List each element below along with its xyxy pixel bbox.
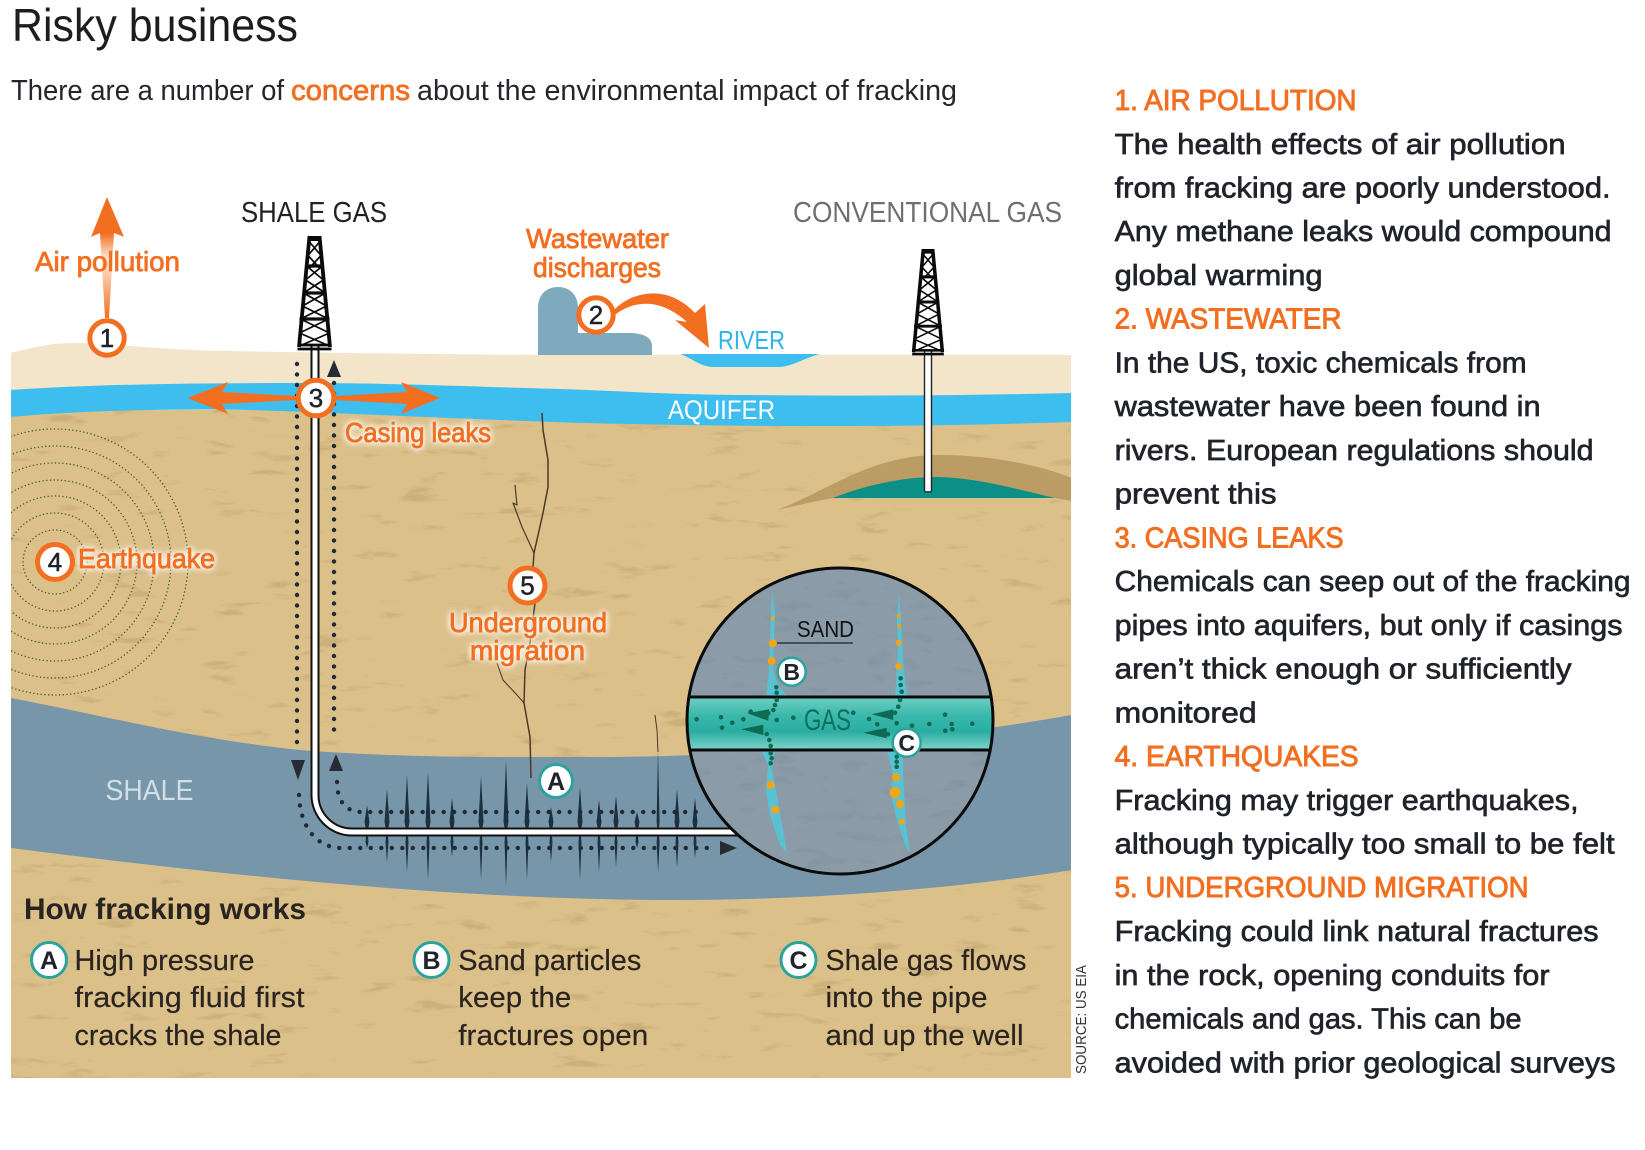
- section 1: air pollution: [1115, 85, 1612, 292]
- panel: magnified fracture view: [680, 566, 1000, 876]
- section 5: underground migration: [1115, 872, 1616, 1079]
- marker B: [778, 658, 806, 686]
- section 3: casing leaks: monitored: [1115, 698, 1257, 730]
- step A: cracks the shale: [74, 1020, 282, 1052]
- badge 2: [579, 298, 613, 332]
- sand label: [777, 616, 854, 643]
- label: aquifer: AQUIFER: [668, 395, 775, 425]
- label: air pollution: Air pollution: [35, 246, 180, 277]
- conventional gas pipe: [924, 350, 932, 492]
- section 2: wastewater: [1114, 304, 1594, 511]
- heading: how fracking works: How fracking works: [24, 893, 306, 926]
- badge 3: 3: [309, 383, 323, 413]
- section 4: earthquakes: 4. EARTHQUAKES: [1115, 741, 1359, 773]
- marker C: [893, 729, 921, 757]
- icon: conventional gas derrick: [912, 249, 944, 354]
- section 5: underground migration: Fracking could link natural fractures: [1115, 916, 1599, 948]
- river: [680, 354, 820, 367]
- section 4: earthquakes: [1115, 741, 1615, 861]
- section 3: casing leaks: [1115, 522, 1631, 730]
- arrow: air pollution: [91, 197, 124, 318]
- step B: Sand particles: [458, 945, 641, 977]
- section 1: air pollution: Any methane leaks would compound: [1115, 216, 1612, 248]
- step C: [781, 942, 1026, 1052]
- step B: keep the: [458, 982, 571, 1014]
- label: earthquake: Earthquake: [78, 543, 215, 574]
- step C: into the pipe: [826, 982, 988, 1014]
- section 4: earthquakes: Fracking may trigger earthquakes,: [1115, 785, 1579, 817]
- section 3: casing leaks: 3. CASING LEAKS: [1115, 522, 1344, 554]
- earthquake rings: [0, 429, 188, 695]
- badge 1: [90, 321, 124, 355]
- marker C: C: [898, 730, 915, 756]
- section 1: air pollution: The health effects of air pollution: [1115, 129, 1566, 161]
- marker B: B: [783, 659, 800, 685]
- section 2: wastewater: rivers. European regulations should: [1115, 435, 1594, 467]
- label: underground migration: Underground: [449, 607, 607, 638]
- badge 1: 1: [100, 323, 114, 353]
- natural fractures: [497, 413, 658, 778]
- fracture left: [761, 592, 788, 853]
- subtitle: concerns: [291, 75, 410, 107]
- band lines: [680, 697, 1000, 750]
- section 5: underground migration: avoided with prior geological surveys: [1115, 1047, 1616, 1079]
- label: conventional gas: CONVENTIONAL GAS: [793, 197, 1062, 229]
- badge 5: 5: [520, 570, 535, 600]
- label: shale gas: SHALE GAS: [241, 197, 387, 229]
- step B: [414, 942, 648, 1052]
- section 4: earthquakes: although typically too small to be felt: [1115, 829, 1615, 861]
- gas reservoir trap: [777, 455, 1072, 510]
- title: Risky business: [12, 0, 298, 51]
- sand label: SAND: [797, 616, 854, 642]
- gas flow arrows: [741, 709, 893, 738]
- label: wastewater discharges: Wastewater: [526, 223, 669, 254]
- shale gas well pipe: [315, 346, 745, 832]
- panel: geological cross-section: [0, 343, 1072, 1078]
- panel: explanations: [1114, 85, 1631, 1079]
- label: casing leaks: Casing leaks: [345, 417, 491, 448]
- flow arrowheads: [291, 360, 737, 855]
- sand particles: [767, 614, 905, 825]
- step A: A: [40, 947, 58, 975]
- step B: B: [422, 947, 441, 975]
- aquifer: [11, 383, 1072, 426]
- badge 2: 2: [589, 300, 603, 330]
- label: underground migration: [449, 607, 607, 666]
- badge 5: [510, 568, 545, 603]
- surface soil layer: [11, 343, 1072, 410]
- section 1: air pollution: from fracking are poorly understood.: [1115, 172, 1611, 204]
- section 5: underground migration: chemicals and gas. This can be: [1115, 1004, 1522, 1036]
- label: shale: SHALE: [106, 775, 194, 807]
- section 2: wastewater: In the US, toxic chemicals from: [1115, 348, 1527, 380]
- subtitle: [11, 75, 957, 107]
- arrow: wastewater discharge: [612, 293, 709, 348]
- section 3: casing leaks: pipes into aquifers, but only if casings: [1115, 610, 1623, 642]
- step C: Shale gas flows: [826, 945, 1026, 977]
- gas-bearing layer: [688, 698, 992, 748]
- conventional gas pocket: [833, 477, 1055, 498]
- marker A: A: [547, 768, 565, 796]
- step C: C: [789, 947, 808, 975]
- step C: and up the well: [826, 1020, 1024, 1052]
- step A: [32, 942, 305, 1052]
- step A: fracking fluid first: [74, 982, 305, 1014]
- arrows: casing leaks: [188, 382, 440, 414]
- gas label: GAS: [804, 704, 851, 737]
- fracture right: [887, 592, 910, 853]
- subtitle: about the environmental impact of fracking: [417, 75, 957, 107]
- section 5: underground migration: in the rock, opening conduits for: [1115, 960, 1550, 992]
- badge 4: 4: [48, 547, 62, 577]
- subtitle: There are a number of: [11, 75, 285, 107]
- waste water tank: [538, 287, 652, 355]
- section 2: wastewater: wastewater have been found in: [1114, 391, 1541, 423]
- gas dots: [694, 676, 975, 769]
- label: underground migration: migration: [470, 635, 585, 666]
- lens rock texture: [685, 566, 995, 876]
- hydraulic fractures along the well: [364, 750, 698, 887]
- label: wastewater discharges: [526, 223, 669, 283]
- label: river: RIVER: [718, 325, 785, 355]
- label: wastewater discharges: discharges: [533, 252, 661, 283]
- section 1: air pollution: global warming: [1115, 260, 1323, 292]
- section 5: underground migration: 5. UNDERGROUND MIGRATION: [1115, 872, 1529, 904]
- dotted flow: fluid down and out: [297, 364, 716, 848]
- section 3: casing leaks: aren’t thick enough or sufficiently: [1115, 654, 1572, 686]
- source note: SOURCE: US EIA: [1073, 965, 1090, 1074]
- marker A: [540, 764, 572, 798]
- step B: fractures open: [458, 1020, 648, 1052]
- badge 3: [298, 380, 334, 416]
- section 1: air pollution: 1. AIR POLLUTION: [1115, 85, 1357, 117]
- section 2: wastewater: 2. WASTEWATER: [1115, 304, 1342, 336]
- shale layer: [11, 698, 1072, 900]
- rock texture: [11, 400, 1071, 1078]
- section 3: casing leaks: Chemicals can seep out of the fracking: [1115, 566, 1631, 598]
- badge 4: [38, 544, 72, 580]
- icon: shale gas derrick: [298, 236, 332, 349]
- section 2: wastewater: prevent this: [1115, 479, 1277, 511]
- step A: High pressure: [74, 945, 254, 977]
